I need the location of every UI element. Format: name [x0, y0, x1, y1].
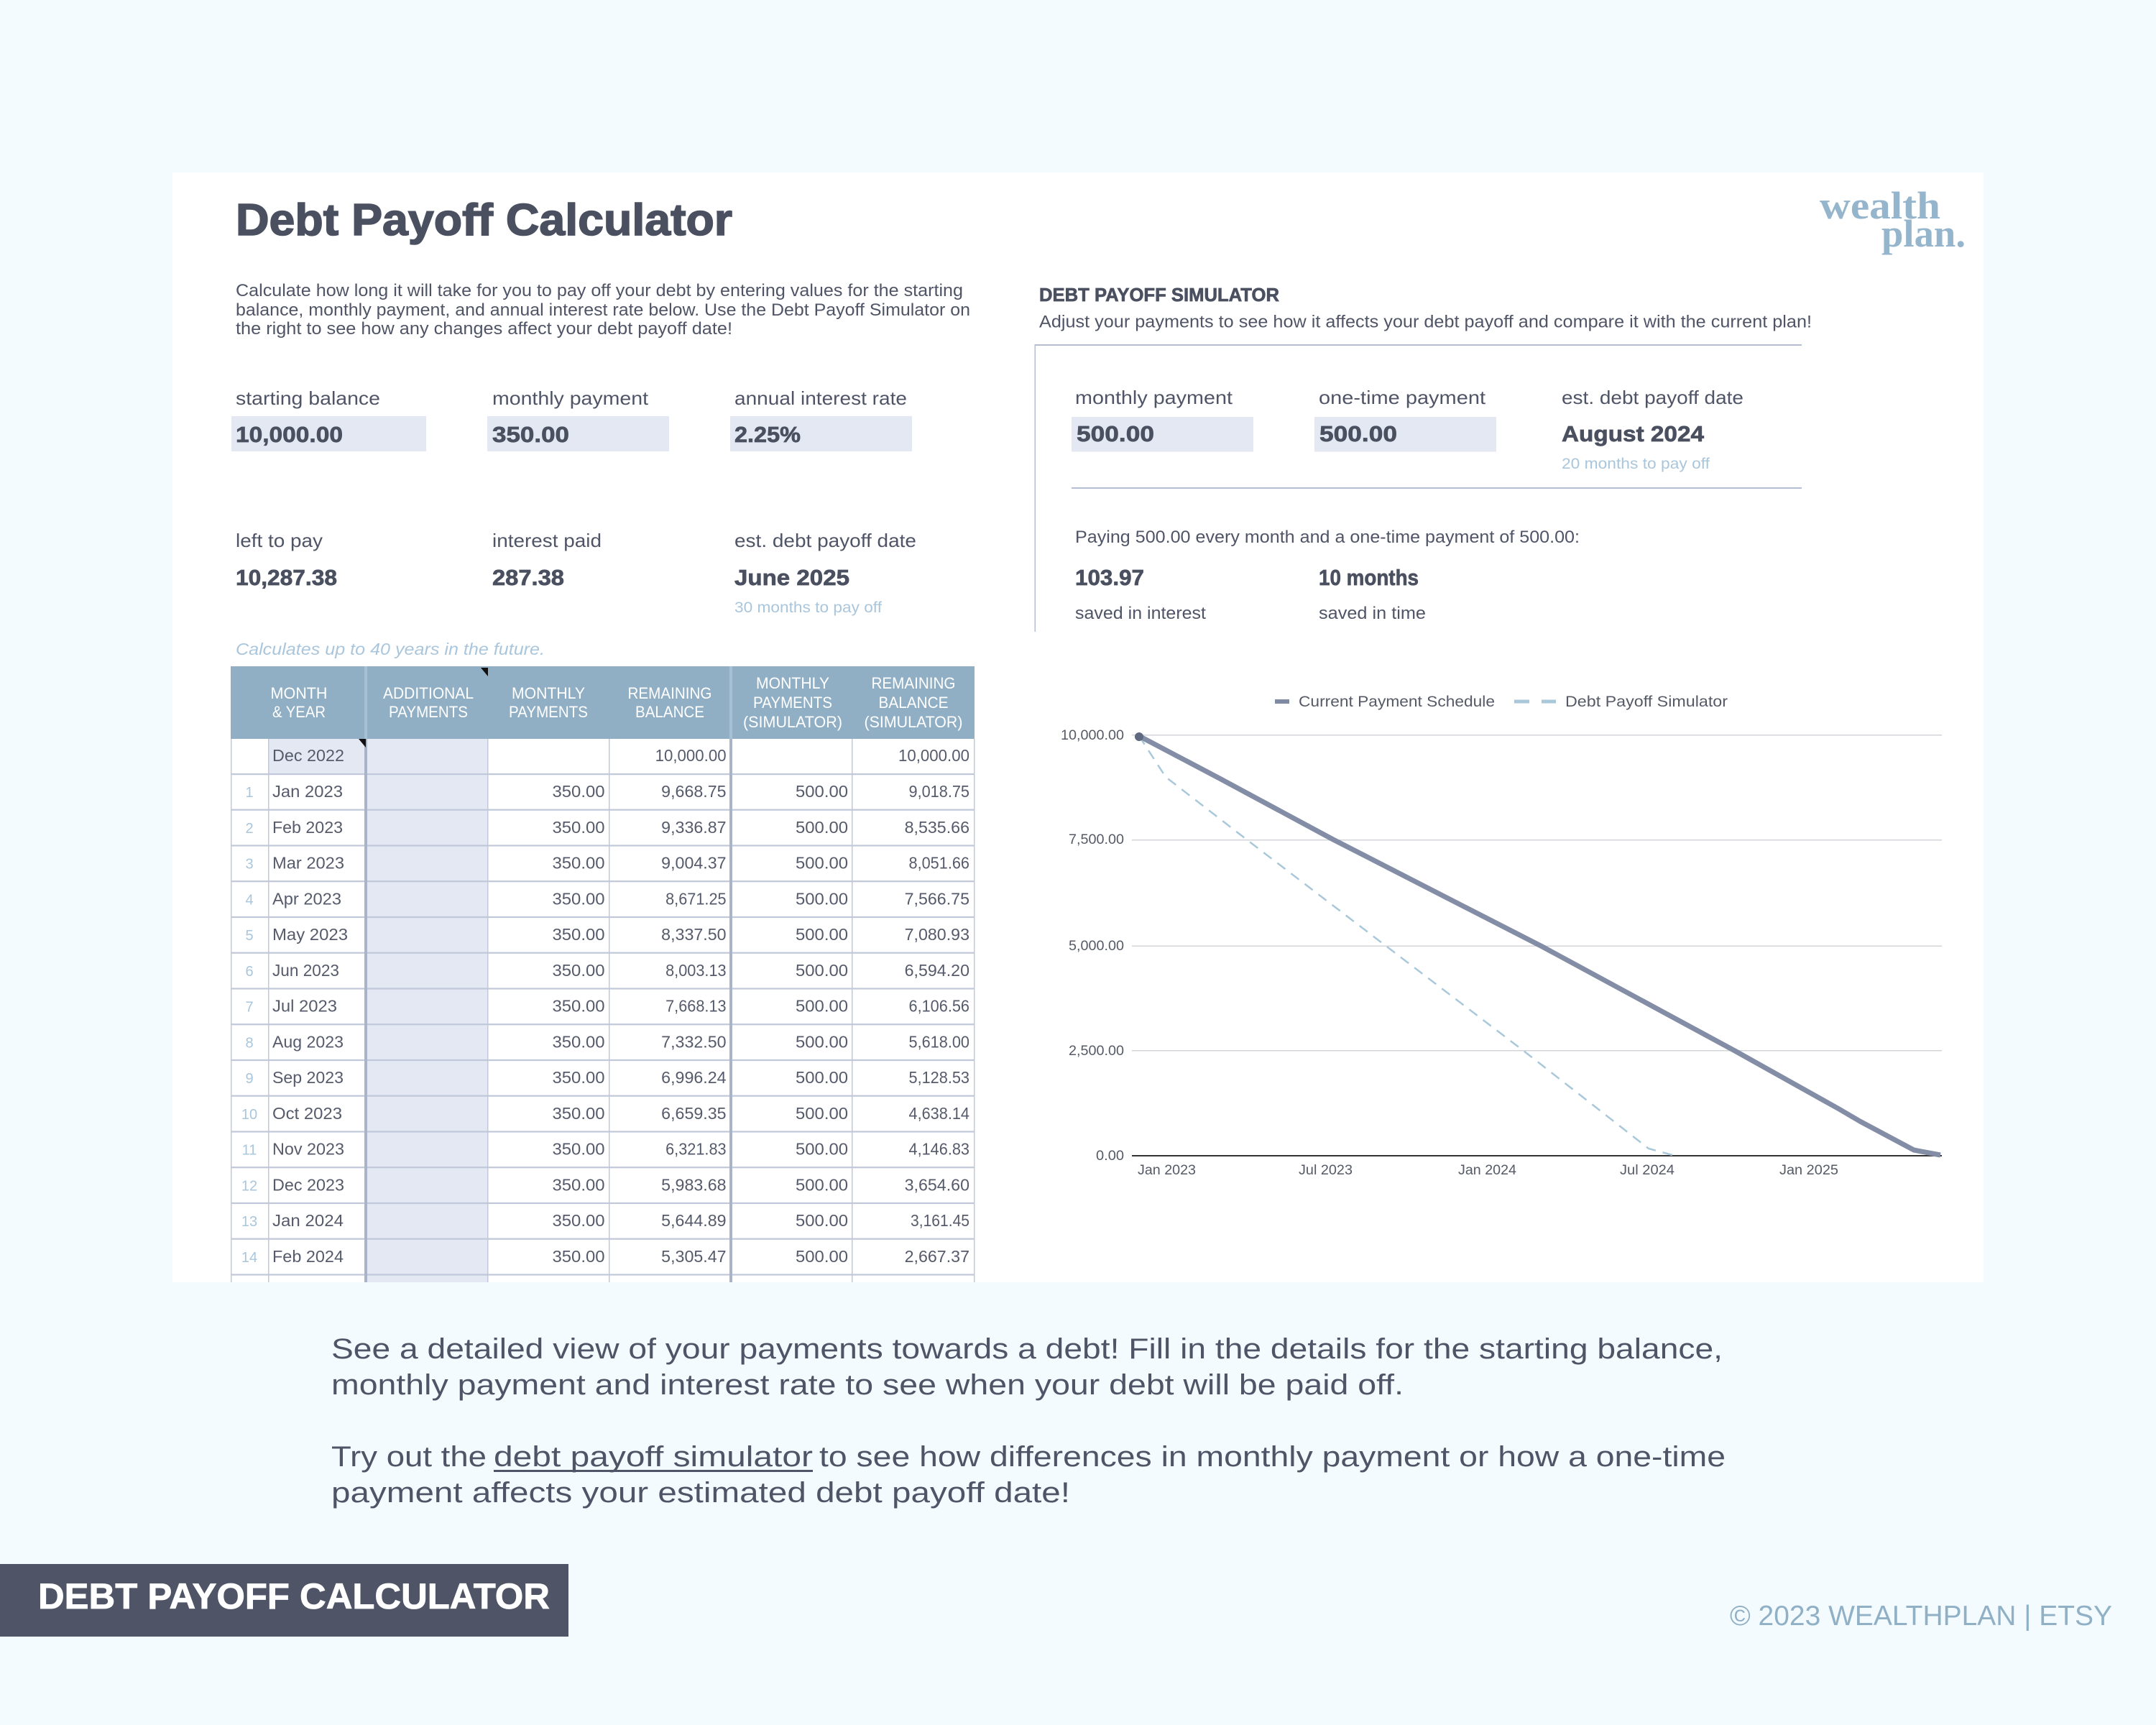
- banner: section label: DEBT PAYOFF CALCULATOR: [38, 1576, 550, 1616]
- stat: simulator payoff date: est. debt payoff date: [1562, 387, 1743, 408]
- row: May 2023: 500.00: [796, 925, 848, 944]
- panel: spreadsheet card: [172, 172, 1984, 1282]
- stat: interest paid: [492, 530, 602, 590]
- stat: saved in time: saved in time: [1319, 604, 1426, 623]
- table header: ADDITIONAL: [383, 684, 474, 702]
- row: Jun 2023: 6: [245, 964, 254, 980]
- row: May 2023: 350.00: [552, 925, 605, 944]
- row: Feb 2024: [241, 1247, 969, 1266]
- x axis labels: Jan 2024: [1458, 1163, 1516, 1178]
- stat: saved in interest: [1075, 565, 1206, 623]
- row: Sep 2023: 350.00: [552, 1068, 605, 1087]
- line: current payment schedule: [1139, 736, 1940, 1155]
- row: Dec 2023: 5,983.68: [661, 1175, 727, 1194]
- row: Sep 2023: 9: [245, 1071, 254, 1087]
- panel: simulator: [1035, 344, 1802, 632]
- row: Sep 2023: [245, 1068, 969, 1087]
- row: Feb 2024: Feb 2024: [272, 1247, 344, 1266]
- y axis labels: 5,000.00: [1069, 939, 1124, 954]
- x axis labels: Jan 2023: [1138, 1163, 1196, 1178]
- row: Jan 2024: 350.00: [552, 1211, 605, 1230]
- title: Debt Payoff Calculator: [236, 196, 732, 245]
- stat: estimated payoff date: 30 months to pay off: [734, 599, 882, 616]
- row: Oct 2023: 10: [241, 1107, 257, 1123]
- row: Jul 2023: 500.00: [796, 996, 848, 1015]
- row: Aug 2023: Aug 2023: [272, 1032, 344, 1051]
- y axis labels: [1061, 728, 1124, 1164]
- row: Dec 2023: Dec 2023: [272, 1175, 344, 1194]
- row: Oct 2023: [241, 1104, 969, 1123]
- table header: PAYMENTS: [509, 703, 588, 721]
- stat: interest paid: interest paid: [492, 530, 602, 551]
- row: Jan 2023: 500.00: [796, 782, 848, 801]
- intro text block: balance, monthly payment, and annual interest rate below. Use the Debt Payoff Simulator on: [236, 300, 970, 320]
- row: Nov 2023: 11: [242, 1143, 257, 1159]
- row: Jul 2023: 7: [245, 999, 254, 1015]
- stat: simulator payoff date: 20 months to pay off: [1562, 456, 1710, 472]
- row: Dec 2022: 10,000.00: [898, 746, 969, 765]
- table header: (SIMULATOR): [864, 713, 963, 731]
- row: Nov 2023: [242, 1140, 969, 1159]
- x axis labels: Jul 2024: [1620, 1163, 1674, 1178]
- row: Dec 2023: 3,654.60: [905, 1175, 969, 1194]
- description text block: Try out the: [331, 1441, 487, 1473]
- input: annual interest rate: 2.25%: [734, 422, 801, 447]
- table header: (SIMULATOR): [743, 713, 842, 731]
- row: Aug 2023: 500.00: [796, 1032, 848, 1051]
- row: Nov 2023: 6,321.83: [665, 1140, 727, 1159]
- row: Apr 2023: 4: [245, 892, 254, 908]
- input: annual interest rate: annual interest rate: [734, 387, 907, 409]
- simulator summary sentence: Paying 500.00 every month and a one-time payment of 500.00:: [1075, 528, 1580, 547]
- intro text block: the right to see how any changes affect your debt payoff date!: [236, 319, 732, 339]
- copyright: © 2023 WEALTHPLAN | ETSY: [1730, 1601, 2112, 1632]
- row: Oct 2023: 4,638.14: [908, 1104, 969, 1123]
- row: Jan 2024: 3,161.45: [911, 1211, 969, 1230]
- row: Feb 2024: 14: [241, 1250, 257, 1266]
- row: Sep 2023: 5,128.53: [908, 1068, 969, 1087]
- chart legend: Debt Payoff Simulator: [1565, 694, 1728, 710]
- stat: saved in interest: saved in interest: [1075, 604, 1206, 623]
- description text block: [331, 1333, 1726, 1509]
- stat: saved in time: [1319, 565, 1426, 623]
- row: Jan 2024: Jan 2024: [272, 1211, 344, 1230]
- row: Jan 2023: 350.00: [552, 782, 605, 801]
- row: Jan 2024: 13: [241, 1214, 257, 1230]
- row: Dec 2022: 10,000.00: [655, 746, 727, 765]
- input: monthly payment: monthly payment: [492, 387, 649, 409]
- row: Oct 2023: 6,659.35: [661, 1104, 727, 1123]
- row: Aug 2023: 7,332.50: [661, 1032, 727, 1051]
- y axis labels: 7,500.00: [1069, 832, 1124, 847]
- row: Jan 2024: 500.00: [796, 1211, 848, 1230]
- row: Nov 2023: 500.00: [796, 1140, 848, 1159]
- input: monthly payment: [487, 387, 669, 451]
- row: Oct 2023: Oct 2023: [272, 1104, 342, 1123]
- row: May 2023: 7,080.93: [905, 925, 969, 944]
- x axis labels: Jul 2023: [1299, 1163, 1353, 1178]
- row: Dec 2023: 12: [241, 1178, 257, 1194]
- row: Jan 2023: 1: [245, 785, 254, 801]
- simulator heading: DEBT PAYOFF SIMULATOR: [1039, 284, 1279, 305]
- row: Jun 2023: Jun 2023: [272, 961, 339, 980]
- description text block: to see how differences in monthly payment or how a one-time: [819, 1441, 1726, 1473]
- row: Feb 2023: 2: [245, 821, 254, 837]
- table header: MONTHLY: [512, 684, 585, 702]
- table header: PAYMENTS: [753, 694, 832, 712]
- table header: REMAINING: [871, 674, 956, 692]
- table header: BALANCE: [635, 703, 704, 721]
- row: Jun 2023: [245, 961, 969, 980]
- stat: interest paid: 287.38: [492, 565, 564, 590]
- row: Mar 2023: 9,004.37: [661, 854, 727, 873]
- row: Jul 2023: 350.00: [552, 996, 605, 1015]
- table header: MONTHLY: [756, 674, 829, 692]
- stat: estimated payoff date: [734, 530, 916, 616]
- row: Dec 2023: 350.00: [552, 1175, 605, 1194]
- row: Jun 2023: 350.00: [552, 961, 605, 980]
- row: Feb 2023: [245, 818, 969, 837]
- logo: wealth plan: plan.: [1881, 212, 1966, 255]
- row: Mar 2023: 3: [245, 857, 254, 873]
- row: Aug 2023: [245, 1032, 969, 1051]
- y axis labels: 0.00: [1096, 1149, 1124, 1164]
- row: Feb 2024: 350.00: [552, 1247, 605, 1266]
- row: Aug 2023: 350.00: [552, 1032, 605, 1051]
- row: Nov 2023: Nov 2023: [272, 1140, 344, 1159]
- row: Mar 2023: Mar 2023: [272, 854, 344, 873]
- row: Mar 2023: 500.00: [796, 854, 848, 873]
- row: Sep 2023: 500.00: [796, 1068, 848, 1087]
- description text block: payment affects your estimated debt payoff date!: [331, 1477, 1070, 1509]
- row: Mar 2023: [245, 854, 969, 873]
- banner: section label: [0, 1564, 568, 1637]
- input: simulator monthly payment: 500.00: [1077, 421, 1154, 446]
- row: Jul 2023: 6,106.56: [908, 996, 969, 1015]
- x axis labels: Jan 2025: [1779, 1163, 1838, 1178]
- row: Nov 2023: 4,146.83: [908, 1140, 969, 1159]
- row: Apr 2023: 350.00: [552, 889, 605, 908]
- y axis labels: 2,500.00: [1069, 1044, 1124, 1059]
- stat: left to pay: [236, 530, 337, 590]
- row: Jan 2023: 9,018.75: [908, 782, 969, 801]
- row: May 2023: May 2023: [272, 925, 348, 944]
- row: Feb 2023: 500.00: [796, 818, 848, 837]
- table header: BALANCE: [878, 694, 949, 712]
- row: Feb 2023: 9,336.87: [661, 818, 727, 837]
- input: starting balance: 10,000.00: [236, 422, 343, 447]
- description text block: monthly payment and interest rate to see when your debt will be paid off.: [331, 1369, 1404, 1401]
- chart legend: [1275, 694, 1728, 710]
- row: Jan 2023: [245, 782, 969, 801]
- x axis labels: [1138, 1163, 1838, 1178]
- stat: estimated payoff date: June 2025: [734, 565, 849, 590]
- row: Jan 2023: 9,668.75: [661, 782, 727, 801]
- input: simulator one-time payment: one-time payment: [1319, 387, 1486, 408]
- row: Jan 2023: Jan 2023: [272, 782, 343, 801]
- row: Oct 2023: 500.00: [796, 1104, 848, 1123]
- input: starting balance: starting balance: [236, 387, 380, 409]
- row: Feb 2023: Feb 2023: [272, 818, 343, 837]
- row: Apr 2023: [245, 889, 969, 908]
- intro text block: Calculate how long it will take for you to pay off your debt by entering values for the starting: [236, 281, 963, 300]
- chart legend: Current Payment Schedule: [1299, 694, 1495, 710]
- row: Sep 2023: 6,996.24: [661, 1068, 727, 1087]
- row: Apr 2023: Apr 2023: [272, 889, 341, 908]
- row: Jul 2023: Jul 2023: [272, 996, 337, 1015]
- y axis labels: 10,000.00: [1061, 728, 1124, 743]
- row: Jul 2023: [245, 996, 969, 1015]
- stat: simulator payoff date: [1562, 387, 1743, 472]
- table header: MONTH: [270, 684, 328, 702]
- input: simulator monthly payment: [1072, 387, 1253, 451]
- row: Feb 2023: 8,535.66: [905, 818, 969, 837]
- row: Dec 2023: [241, 1175, 969, 1194]
- row: Jun 2023: 6,594.20: [905, 961, 969, 980]
- input: simulator one-time payment: 500.00: [1319, 421, 1397, 446]
- logo: wealth plan: [1820, 184, 1966, 255]
- row: May 2023: 8,337.50: [661, 925, 727, 944]
- row: Feb 2024: 500.00: [796, 1247, 848, 1266]
- row: Nov 2023: 350.00: [552, 1140, 605, 1159]
- row: Sep 2023: Sep 2023: [272, 1068, 344, 1087]
- stat: simulator payoff date: August 2024: [1562, 421, 1705, 446]
- table note: Calculates up to 40 years in the future.: [236, 640, 545, 658]
- row: Jan 2024: 5,644.89: [661, 1211, 727, 1230]
- chart: debt payoff line chart: [1061, 694, 1942, 1178]
- row: Apr 2023: 8,671.25: [665, 889, 727, 908]
- row: May 2023: 5: [245, 928, 254, 944]
- input: simulator monthly payment: monthly payment: [1075, 387, 1233, 408]
- table header: [231, 666, 975, 739]
- row: Jun 2023: 8,003.13: [665, 961, 727, 980]
- row: Feb 2024: 2,667.37: [905, 1247, 969, 1266]
- intro text block: [236, 281, 970, 339]
- simulator heading: Adjust your payments to see how it affects your debt payoff and compare it with the current plan!: [1039, 312, 1812, 332]
- row: Apr 2023: 500.00: [796, 889, 848, 908]
- row: Feb 2024: 5,305.47: [661, 1247, 727, 1266]
- input: simulator one-time payment: [1314, 387, 1496, 451]
- row: Feb 2023: 350.00: [552, 818, 605, 837]
- stat: left to pay: 10,287.38: [236, 565, 337, 590]
- row: Jul 2023: 7,668.13: [665, 996, 727, 1015]
- stat: left to pay: left to pay: [236, 530, 323, 551]
- input: annual interest rate: [730, 387, 912, 451]
- row: Dec 2022: [272, 739, 969, 765]
- row: Dec 2022: Dec 2022: [272, 746, 344, 765]
- row: May 2023: [245, 925, 969, 944]
- simulator heading: [1039, 284, 1812, 332]
- description text block: debt payoff simulator: [494, 1441, 813, 1473]
- row: Mar 2023: 8,051.66: [908, 854, 969, 873]
- input: starting balance: [231, 387, 426, 451]
- stat: estimated payoff date: est. debt payoff date: [734, 530, 916, 551]
- logo: wealth plan: wealth: [1820, 184, 1940, 227]
- description text block: See a detailed view of your payments towards a debt! Fill in the details for the starting balance,: [331, 1333, 1723, 1365]
- panel: payment schedule table: [231, 666, 975, 1282]
- row: Apr 2023: 7,566.75: [905, 889, 969, 908]
- line: debt payoff simulator: [1139, 736, 1672, 1155]
- stat: saved in time: 10 months: [1319, 565, 1419, 590]
- table header: REMAINING: [628, 684, 711, 702]
- row: Mar 2023: 350.00: [552, 854, 605, 873]
- table header: & YEAR: [272, 703, 326, 721]
- start marker: [1135, 732, 1143, 741]
- row: Jan 2024: [241, 1211, 969, 1230]
- row: Aug 2023: 8: [245, 1035, 254, 1051]
- stat: saved in interest: 103.97: [1075, 565, 1144, 590]
- row: Jun 2023: 500.00: [796, 961, 848, 980]
- input: monthly payment: 350.00: [492, 422, 569, 447]
- row: Oct 2023: 350.00: [552, 1104, 605, 1123]
- row: Aug 2023: 5,618.00: [908, 1032, 969, 1051]
- table header: PAYMENTS: [389, 703, 468, 721]
- row: Dec 2023: 500.00: [796, 1175, 848, 1194]
